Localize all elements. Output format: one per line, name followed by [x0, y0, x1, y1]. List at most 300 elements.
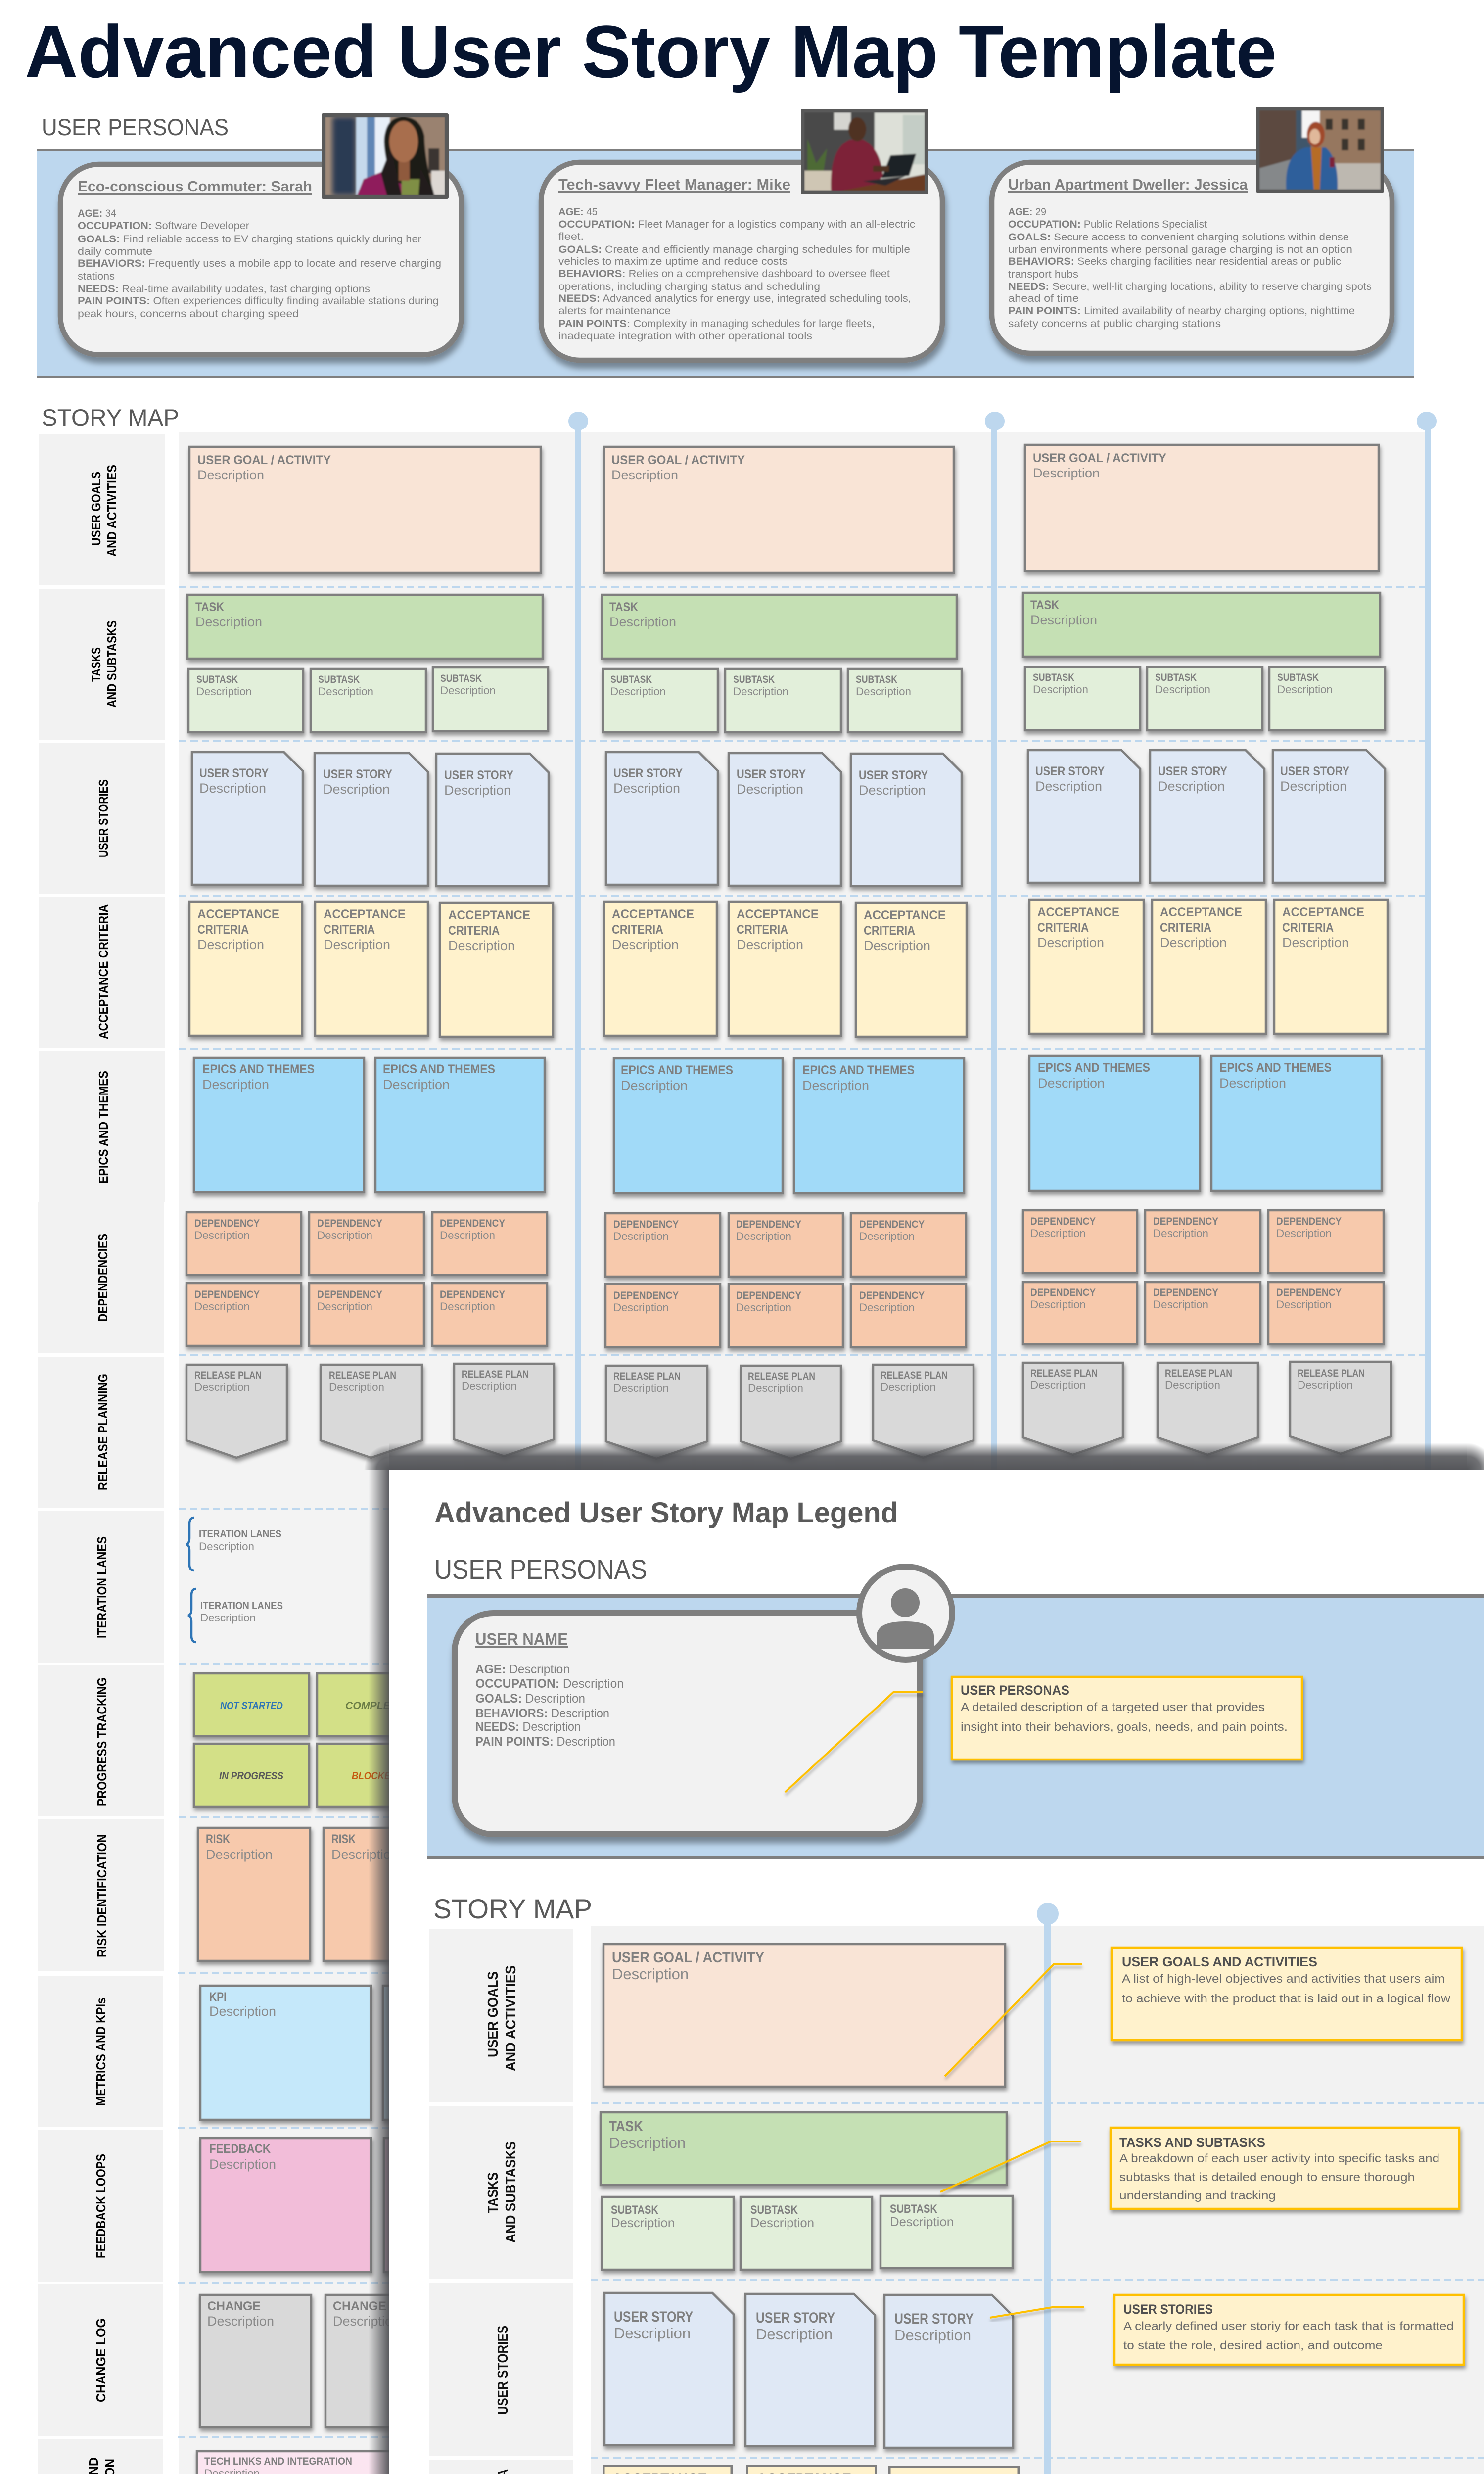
row label: acceptance criteria: ACCEPTANCE CRITERIA: [96, 904, 111, 1039]
legend persona card: [455, 1613, 920, 1834]
column 1: task card: TASK: [195, 600, 224, 614]
column 3: subtask 1: [1025, 667, 1140, 730]
column 2: epic 1: Description: [621, 1078, 688, 1093]
column 1: user story 2: [315, 753, 428, 886]
column 1: acceptance criteria 1: CRITERIA: [197, 923, 249, 937]
column 1: release plans: RELEASE PLAN: [462, 1369, 529, 1380]
row label: technology and integration (cropped by the frame): [38, 2439, 163, 2474]
persona card: Jessica: AGE: 29: [1008, 206, 1046, 218]
column 3: acceptance criteria 1: ACCEPTANCE: [1037, 905, 1119, 919]
column 2: dependency cards: Description: [736, 1301, 791, 1314]
risk card 1: Description: [206, 1847, 273, 1862]
persona card: Mike: OCCUPATION: Fleet Manager for a logistics company with an all-electric: [558, 219, 915, 230]
callout: user personas: insight into their behaviors, goals, needs, and pain points.: [961, 1720, 1288, 1734]
column 1: dependency cards: DEPENDENCY: [194, 1218, 260, 1229]
column 3: release plans: Description: [1030, 1379, 1086, 1391]
feedback card 1: Description: [209, 2157, 276, 2172]
change card 2: CHANGE: [333, 2299, 386, 2313]
iteration lane 2: Description: [200, 1612, 256, 1624]
column divider: second: [985, 412, 1005, 1475]
column 2: user story 1: Description: [613, 781, 680, 796]
column 1: subtask 2: [311, 669, 426, 732]
callout: user stories: to state the role, desired action, and outcome: [1123, 2339, 1383, 2352]
legend: user story 3: USER STORY: [894, 2311, 974, 2327]
legend: user goal card: [603, 1944, 1005, 2087]
callout: tasks and subtasks: understanding and tracking: [1119, 2189, 1276, 2202]
heading: user personas: USER PERSONAS: [42, 114, 229, 140]
change card 1: Description: [207, 2314, 274, 2329]
legend story map grid: [591, 1926, 1484, 2474]
column 1: dependency cards: Description: [194, 1300, 250, 1313]
column 1: user story 1: [192, 752, 303, 885]
column 2: subtask 1: [603, 669, 718, 732]
status: in progress: [194, 1744, 309, 1807]
column 3: acceptance criteria 3: [1274, 900, 1388, 1034]
column 1: user story 2: USER STORY: [323, 767, 392, 781]
column 2: dependency cards: DEPENDENCY: [613, 1290, 679, 1301]
column 2: user story 3: [851, 754, 962, 886]
row label: user goals and activities: AND ACTIVITIES: [104, 465, 119, 557]
column 2: task card: TASK: [609, 600, 638, 614]
column 3: task card: [1023, 593, 1380, 657]
persona card: Jessica: safety concerns at public charging stations: [1008, 318, 1221, 330]
callout: user personas: [952, 1677, 1302, 1760]
callout: tasks and subtasks: A breakdown of each user activity into specific tasks and: [1119, 2152, 1439, 2165]
legend persona card: GOALS: Description: [475, 1692, 585, 1706]
persona card: Mike: fleet.: [558, 231, 584, 242]
row label: risk identification: [38, 1819, 164, 1971]
column 1: task card: [187, 595, 543, 659]
column 3: acceptance criteria 2: ACCEPTANCE: [1160, 905, 1242, 919]
column 2: dependency cards: Description: [613, 1301, 669, 1314]
legend personas band: [427, 1594, 1484, 1859]
column 3: acceptance criteria 3: Description: [1282, 935, 1349, 950]
persona card: Mike: inadequate integration with other operational tools: [558, 331, 812, 342]
callout: user goals and activities: [1112, 1948, 1462, 2040]
row label: change log: [38, 2284, 163, 2436]
persona card: Jessica: OCCUPATION: Public Relations Specialist: [1008, 219, 1207, 230]
column 1: dependency cards: Description: [317, 1229, 372, 1241]
change card 1: CHANGE: [207, 2299, 261, 2313]
status: blocked: BLOCKED: [352, 1770, 397, 1782]
legend row label: tasks and subtasks: AND SUBTASKS: [503, 2141, 519, 2243]
legend: subtask 3: Description: [890, 2215, 954, 2229]
column 3: subtask 3: SUBTASK: [1277, 672, 1319, 683]
column 3: dependency cards: DEPENDENCY: [1030, 1287, 1096, 1298]
row label: progress tracking: PROGRESS TRACKING: [94, 1677, 109, 1806]
persona card: Mike: AGE: 45: [558, 206, 598, 218]
column 2: acceptance criteria 3: CRITERIA: [864, 924, 915, 938]
column 2: dependency cards: Description: [736, 1230, 791, 1242]
legend: task card: Description: [609, 2134, 686, 2151]
row label: metrics and KPIs: METRICS AND KPIs: [93, 1998, 108, 2106]
column 2: user story 3: Description: [859, 783, 926, 798]
column 2: acceptance criteria 3: [856, 903, 967, 1037]
persona card: Sarah: PAIN POINTS: Often experiences difficulty finding available stations during: [78, 295, 439, 307]
legend: user story 2: USER STORY: [756, 2310, 835, 2326]
legend: user story 3: [884, 2295, 1013, 2448]
column 2: dependency cards: Description: [613, 1230, 669, 1242]
callout: tasks and subtasks: TASKS AND SUBTASKS: [1119, 2135, 1265, 2150]
tech links card: [197, 2451, 543, 2474]
column 3: dependency cards: DEPENDENCY: [1153, 1216, 1218, 1227]
row label: user goals and activities: [39, 434, 165, 585]
callout: user goals and activities: to achieve with the product that is laid out in a logical flow: [1122, 1992, 1451, 2005]
persona card: Jessica: urban environments where personal garage charging is not an option: [1008, 244, 1352, 255]
legend: task card: TASK: [609, 2118, 643, 2135]
column 3: acceptance criteria 3: ACCEPTANCE: [1282, 905, 1364, 919]
persona card: Sarah: peak hours, concerns about charging speed: [78, 308, 299, 320]
column 2: user story 1: USER STORY: [613, 766, 683, 780]
legend: acceptance criteria 3: [888, 2466, 1020, 2474]
legend drop shadow: [364, 1443, 1484, 2474]
column 1: dependency cards: DEPENDENCY: [194, 1289, 260, 1300]
column 3: release plans: Description: [1298, 1379, 1353, 1391]
column 3: user story 1: Description: [1035, 779, 1102, 794]
legend: subtask 3: [881, 2196, 1013, 2268]
legend persona card: USER NAME: [475, 1630, 568, 1648]
column 1: dependency cards: Description: [440, 1300, 495, 1313]
column 1: dependency cards: DEPENDENCY: [317, 1289, 382, 1300]
column 3: dependency cards: Description: [1030, 1227, 1086, 1239]
callout: user personas: A detailed description of a targeted user that provides: [961, 1701, 1265, 1714]
column 3: user story 3: [1273, 750, 1385, 883]
legend: user goal card: Description: [612, 1965, 689, 1983]
row label: tasks and subtasks: [39, 589, 165, 740]
status: complete: COMPLETE: [345, 1700, 404, 1712]
column 2: user goal card: [604, 447, 954, 573]
column 2: dependency cards: [605, 1213, 966, 1347]
persona card: Sarah: stations: [78, 271, 115, 282]
persona card: Mike: [541, 162, 942, 360]
column 2: release plans: RELEASE PLAN: [613, 1371, 681, 1382]
panel: story map grid background: [179, 432, 1431, 2474]
column 2: task card: Description: [609, 615, 676, 629]
column 1: dependency cards: Description: [317, 1300, 372, 1313]
column 1: epic 1: [194, 1058, 364, 1192]
column 2: dependency cards: Description: [859, 1301, 915, 1314]
column 3: subtask 1: Description: [1033, 683, 1088, 696]
connector: tasks: [940, 2141, 1081, 2192]
column 1: user story 2: Description: [323, 782, 390, 797]
column 3: dependency cards: Description: [1276, 1227, 1332, 1239]
column 2: epic 1: EPICS AND THEMES: [621, 1063, 733, 1077]
legend: user goal card: USER GOAL / ACTIVITY: [612, 1950, 764, 1966]
column 2: dependency cards: DEPENDENCY: [859, 1290, 925, 1301]
column 1: subtask 1: SUBTASK: [196, 674, 238, 685]
persona card: Sarah: GOALS: Find reliable access to EV charging stations quickly during her: [78, 234, 421, 245]
row label: epics and themes: EPICS AND THEMES: [96, 1071, 111, 1184]
column 3: epic 2: [1211, 1056, 1382, 1191]
column 3: release plans: RELEASE PLAN: [1165, 1368, 1232, 1379]
persona card: Sarah: NEEDS: Real-time availability updates, fast charging options: [78, 284, 370, 295]
column 3: task card: Description: [1030, 613, 1097, 627]
row label: change log: CHANGE LOG: [93, 2318, 108, 2402]
status: not started: NOT STARTED: [220, 1700, 283, 1712]
column 2: subtask 2: Description: [733, 685, 788, 698]
column 3: release plans: Description: [1165, 1379, 1220, 1391]
column 3: user story 2: [1150, 750, 1264, 883]
row label: feedback loops: FEEDBACK LOOPS: [93, 2154, 108, 2258]
column 2: user goal card: Description: [611, 468, 678, 482]
persona card: Sarah: Eco-conscious Commuter: Sarah: [78, 178, 312, 195]
column 1: subtask 1: Description: [196, 685, 252, 698]
column 1: epic 2: EPICS AND THEMES: [383, 1062, 495, 1076]
column 1: epic 2: [375, 1058, 545, 1192]
persona card: Jessica: transport hubs: [1008, 269, 1078, 280]
KPI card 2: [383, 1986, 554, 2120]
persona card: Mike: vehicles to maximize uptime and reduce costs: [558, 256, 788, 267]
column 3: user story 1: [1028, 750, 1140, 883]
column 1: acceptance criteria 2: Description: [324, 937, 390, 952]
row label: release planning: RELEASE PLANNING: [95, 1374, 110, 1490]
iteration lane 2: ITERATION LANES: [200, 1600, 283, 1612]
callout: tasks and subtasks: subtasks that is detailed enough to ensure thorough: [1119, 2171, 1415, 2184]
column 3: user story 3: Description: [1280, 779, 1347, 794]
status: not started: [194, 1673, 309, 1736]
column 2: task card: [602, 595, 957, 659]
column 2: acceptance criteria 3: Description: [864, 938, 930, 953]
column 2: subtask 2: [725, 669, 841, 732]
column 1: release plans: Description: [462, 1380, 517, 1392]
risk card 2: RISK: [331, 1832, 356, 1846]
column 3: subtask 1: SUBTASK: [1033, 672, 1074, 683]
column 2: acceptance criteria 3: ACCEPTANCE: [864, 908, 946, 922]
row label: risk identification: RISK IDENTIFICATION: [94, 1834, 109, 1957]
column 1: dependency cards: DEPENDENCY: [440, 1289, 505, 1300]
column 3: user story 2: Description: [1158, 779, 1225, 794]
change card 2: [325, 2295, 437, 2427]
legend: subtask 2: Description: [750, 2216, 814, 2230]
legend row label: user goals and activities: [429, 1929, 573, 2102]
column 1: task card: Description: [195, 615, 262, 629]
row label: dependencies: DEPENDENCIES: [95, 1234, 110, 1322]
column 1: acceptance criteria 1: Description: [197, 937, 264, 952]
column 2: user story 1: [606, 752, 718, 885]
column 1: user story 1: Description: [199, 781, 266, 796]
row label: user stories: [39, 743, 165, 894]
column 1: release plans: RELEASE PLAN: [329, 1370, 396, 1381]
risk card 2: [324, 1828, 436, 1961]
change card 1: [200, 2295, 311, 2427]
callout: user stories: [1114, 2295, 1464, 2365]
column 3: release plans: RELEASE PLAN: [1030, 1368, 1098, 1379]
panel: user personas band: [37, 149, 1414, 378]
status: in progress: IN PROGRESS: [219, 1770, 283, 1782]
row label: iteration lanes: [38, 1511, 164, 1663]
legend heading: story map: STORY MAP: [433, 1893, 592, 1924]
column 1: user goal card: [189, 447, 541, 573]
persona card: Sarah: [60, 164, 462, 355]
column 1: dependency cards: Description: [440, 1229, 495, 1241]
persona card: Mike: alerts for maintenance: [558, 305, 671, 317]
column 3: epic 1: Description: [1038, 1076, 1105, 1091]
column 3: epic 1: EPICS AND THEMES: [1038, 1061, 1150, 1075]
column 3: epic 1: [1029, 1056, 1200, 1191]
legend: subtask 1: Description: [611, 2216, 675, 2230]
persona card: Mike: PAIN POINTS: Complexity in managing schedules for large fleets,: [558, 318, 875, 330]
column 3: release plans: [1023, 1362, 1391, 1455]
status: blocked: [317, 1744, 432, 1807]
column 3: subtask 3: [1269, 667, 1385, 730]
legend: user story 2: Description: [756, 2326, 833, 2343]
column 1: acceptance criteria 3: CRITERIA: [448, 924, 500, 938]
column 2: dependency cards: Description: [859, 1230, 915, 1242]
legend: acceptance criteria 2: [746, 2465, 877, 2474]
column 3: acceptance criteria 1: Description: [1037, 935, 1104, 950]
callout: user stories: USER STORIES: [1123, 2302, 1213, 2317]
column 3: subtask 3: Description: [1277, 683, 1333, 696]
column 1: epic 1: Description: [202, 1077, 269, 1092]
feedback card 1: FEEDBACK: [209, 2142, 271, 2156]
legend row label: acceptance criteria (cropped by the frame): [429, 2460, 573, 2474]
column 2: subtask 3: SUBTASK: [856, 674, 897, 685]
column 3: dependency cards: Description: [1030, 1298, 1086, 1311]
heading: story map: STORY MAP: [42, 404, 179, 430]
feedback card 2: [384, 2138, 555, 2272]
persona card: Mike: operations, including charging status and scheduling: [558, 281, 820, 292]
callout: user personas: USER PERSONAS: [961, 1683, 1069, 1698]
column 1: epic 1: EPICS AND THEMES: [202, 1062, 315, 1076]
column 1: acceptance criteria 1: ACCEPTANCE: [197, 907, 279, 921]
title: Advanced User Story Map Template: [25, 10, 1277, 93]
legend: user story 2: [745, 2294, 875, 2446]
column 2: dependency cards: DEPENDENCY: [736, 1219, 801, 1230]
column 2: acceptance criteria 2: CRITERIA: [737, 923, 788, 937]
persona card: Sarah: AGE: 34: [78, 208, 116, 219]
column 1: release plans: RELEASE PLAN: [194, 1370, 262, 1381]
column 3: user goal card: [1025, 445, 1379, 571]
persona card: Jessica: [992, 162, 1392, 353]
column 3: acceptance criteria 3: CRITERIA: [1282, 921, 1334, 935]
legend column divider: [1037, 1903, 1059, 2474]
column 3: user story 2: USER STORY: [1158, 764, 1227, 778]
legend row label: user goals and activities: AND ACTIVITIES: [503, 1965, 519, 2071]
legend: subtask 1: [602, 2197, 734, 2270]
column 2: epic 2: Description: [802, 1078, 869, 1093]
column 1: dependency cards: Description: [194, 1229, 250, 1241]
column 2: user story 2: [729, 753, 841, 886]
column 1: dependency cards: DEPENDENCY: [317, 1218, 382, 1229]
column 1: user story 3: Description: [444, 783, 511, 798]
legend: subtask 1: SUBTASK: [611, 2203, 659, 2217]
column 1: acceptance criteria 3: Description: [448, 938, 515, 953]
column 2: epic 1: [614, 1058, 783, 1193]
column 3: release plans: RELEASE PLAN: [1298, 1368, 1365, 1379]
icon: user avatar: [859, 1567, 952, 1660]
column 1: user goal card: Description: [197, 468, 264, 482]
legend: user story 3: Description: [894, 2327, 971, 2344]
legend: subtask 3: SUBTASK: [890, 2202, 938, 2216]
callout: user goals and activities: A list of high-level objectives and activities that users aim: [1122, 1972, 1445, 1986]
row label: feedback loops: [38, 2130, 163, 2282]
legend persona card: NEEDS: Description: [475, 1720, 581, 1734]
column 1: release plans: Description: [194, 1381, 250, 1393]
persona card: Jessica: BEHAVIORS: Seeks charging facilities near residential areas or public: [1008, 256, 1341, 267]
legend persona card: BEHAVIORS: Description: [475, 1707, 609, 1720]
risk card 2: Description: [331, 1847, 398, 1862]
column 1: dependency cards: [186, 1212, 547, 1346]
column 3: dependency cards: Description: [1276, 1298, 1332, 1311]
persona card: Sarah: BEHAVIORS: Frequently uses a mobile app to locate and reserve charging: [78, 258, 441, 269]
column 3: dependency cards: DEPENDENCY: [1030, 1216, 1096, 1227]
connector: user stories: [990, 2307, 1084, 2318]
column 2: user story 2: Description: [737, 782, 803, 797]
persona card: Jessica: PAIN POINTS: Limited availability of nearby charging options, nighttime: [1008, 305, 1355, 317]
row label: release planning: [38, 1357, 164, 1508]
column 2: subtask 3: [848, 669, 962, 732]
column 1: user goal card: USER GOAL / ACTIVITY: [197, 453, 331, 467]
legend row label: user stories: USER STORIES: [495, 2326, 511, 2415]
persona card: Jessica: GOALS: Secure access to convenient charging solutions within dense: [1008, 232, 1349, 243]
iteration lane 1: Description: [199, 1540, 254, 1553]
status: complete: [317, 1673, 432, 1736]
legend persona card: OCCUPATION: Description: [475, 1677, 624, 1691]
iteration lane 1: [186, 1518, 281, 1570]
persona card: Sarah: OCCUPATION: Software Developer: [78, 220, 249, 232]
KPI card 1: [200, 1986, 371, 2120]
column 3: user story 3: USER STORY: [1280, 764, 1349, 778]
column 2: release plans: [606, 1365, 974, 1459]
legend row label: tasks and subtasks: TASKS: [485, 2172, 501, 2213]
column divider: first: [568, 412, 588, 1475]
column 2: acceptance criteria 2: [729, 902, 841, 1036]
connector: user goals: [945, 1964, 1082, 2076]
column 2: user goal card: USER GOAL / ACTIVITY: [611, 453, 745, 467]
legend title: Advanced User Story Map Legend: [434, 1497, 898, 1529]
persona photo: Jessica: [1256, 107, 1384, 193]
column 2: dependency cards: DEPENDENCY: [613, 1219, 679, 1230]
iteration lane 2: [188, 1589, 283, 1642]
column 2: release plans: RELEASE PLAN: [748, 1371, 815, 1382]
row label: dependencies: [38, 1202, 164, 1353]
legend heading: user personas: USER PERSONAS: [434, 1554, 647, 1585]
column 2: subtask 3: Description: [856, 685, 911, 698]
column 2: acceptance criteria 1: ACCEPTANCE: [612, 907, 694, 921]
row label: user stories: USER STORIES: [96, 779, 111, 857]
column 3: subtask 2: Description: [1155, 683, 1210, 696]
column 2: acceptance criteria 1: [604, 902, 717, 1036]
change card 2: Description: [333, 2314, 400, 2329]
column 3: user story 1: USER STORY: [1035, 764, 1105, 778]
column 2: epic 2: EPICS AND THEMES: [802, 1063, 915, 1077]
column 3: acceptance criteria 1: CRITERIA: [1037, 921, 1089, 935]
column 2: release plans: Description: [748, 1382, 803, 1394]
column 2: acceptance criteria 1: Description: [612, 937, 679, 952]
persona card: Mike: NEEDS: Advanced analytics for energy use, integrated scheduling tools,: [558, 293, 911, 304]
column 3: acceptance criteria 1: [1029, 900, 1144, 1034]
legend panel: [389, 1470, 1484, 2474]
column 1: acceptance criteria 3: [440, 903, 553, 1037]
row label: progress tracking: [38, 1665, 164, 1816]
column 3: dependency cards: Description: [1153, 1227, 1208, 1239]
column 1: subtask 3: SUBTASK: [440, 673, 482, 684]
column 3: subtask 2: SUBTASK: [1155, 672, 1197, 683]
column 2: release plans: Description: [613, 1382, 669, 1394]
column 2: dependency cards: DEPENDENCY: [859, 1219, 925, 1230]
persona card: Jessica: ahead of time: [1008, 293, 1079, 304]
column 2: user story 3: USER STORY: [859, 768, 928, 782]
row label: acceptance criteria: [39, 897, 165, 1048]
row label: epics and themes: [39, 1051, 165, 1202]
legend: task card: [601, 2112, 1007, 2185]
column 2: release plans: Description: [881, 1381, 936, 1393]
column 1: user story 1: USER STORY: [199, 766, 269, 780]
row label: metrics and KPIs: [38, 1976, 163, 2127]
column 1: epic 2: Description: [383, 1077, 450, 1092]
column 2: acceptance criteria 2: Description: [737, 937, 803, 952]
persona photo: Mike: [801, 109, 928, 194]
